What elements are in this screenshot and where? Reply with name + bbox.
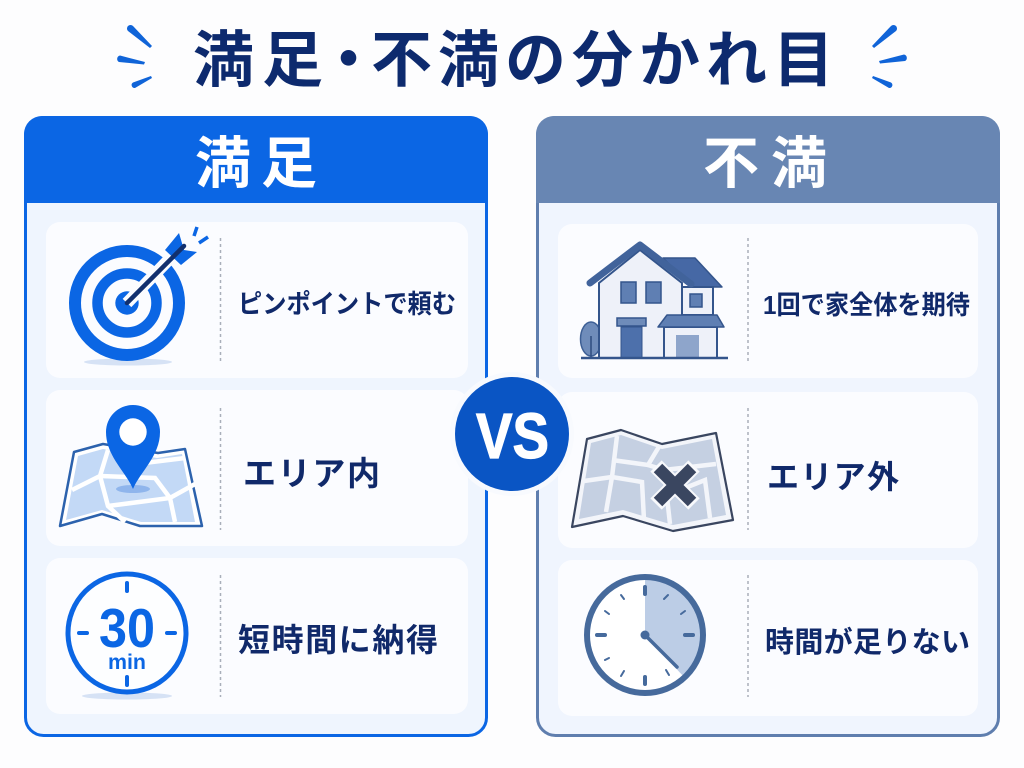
card: short time: [46, 558, 468, 714]
card: pinpoint: [46, 222, 468, 378]
label: whole house: 1回で家全体を期待: [763, 290, 970, 320]
card: within area: [46, 390, 468, 546]
icon: left title sparks: [117, 25, 152, 88]
icon: target with arrow: [75, 227, 208, 366]
icon: right title sparks: [872, 25, 907, 88]
title: 満足・不満の分かれ目: [193, 26, 834, 94]
label: pinpoint: ピンポイントで頼む: [238, 289, 456, 319]
panel header: dissatisfied: [536, 116, 1000, 203]
icon: 30 min timer: 30: [99, 597, 155, 659]
label: within area: エリア内: [243, 455, 380, 492]
VS badge: VS: [476, 400, 549, 472]
icon: 30 min timer: min: [108, 651, 146, 674]
icon: clock: [587, 577, 703, 693]
panel header: satisfied: [24, 116, 488, 203]
label: outside area: エリア外: [767, 459, 899, 495]
icon: house: [580, 245, 728, 358]
card: not enough time: [558, 560, 978, 716]
card: outside area: [558, 392, 978, 548]
VS badge: [450, 372, 574, 496]
panel: dissatisfied: [536, 116, 1000, 736]
panel: satisfied: [24, 116, 488, 736]
label: short time: 短時間に納得: [238, 622, 438, 658]
icon: map with pin: [60, 405, 202, 526]
icon: 30 min timer: [68, 574, 186, 700]
heading: 不満: 不満: [703, 132, 827, 195]
label: not enough time: 時間が足りない: [765, 625, 970, 659]
card: whole house: [558, 224, 978, 378]
icon: map with cross: [572, 430, 733, 531]
heading: 満足: 満足: [195, 132, 317, 195]
